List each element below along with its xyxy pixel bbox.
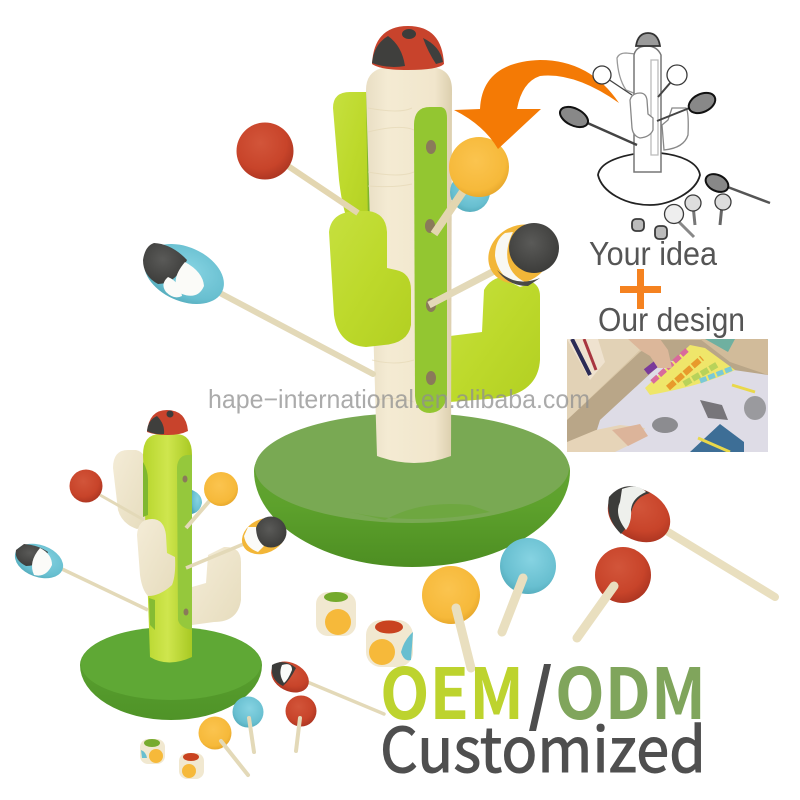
colour fan xyxy=(645,345,735,395)
front arm xyxy=(329,211,411,347)
ODM: ODM xyxy=(555,639,706,740)
large yellow peg xyxy=(422,566,480,668)
title: OEM/ODM xyxy=(380,639,706,740)
OEM: OEM xyxy=(380,639,524,740)
small red peg xyxy=(286,696,316,751)
watermark: hape−international.en.alibaba.com xyxy=(208,384,590,414)
red ball with stick xyxy=(236,122,358,213)
subtitle: Customized: Customized xyxy=(380,700,706,790)
green strip on trunk xyxy=(414,107,447,413)
orange curved arrow xyxy=(454,60,619,149)
small yellow peg xyxy=(198,716,248,775)
sketch: pegs xyxy=(574,117,637,145)
wooden trunk xyxy=(366,67,452,463)
small bee ball xyxy=(186,511,292,568)
sketch: right arm xyxy=(662,108,688,150)
small strip xyxy=(177,455,192,630)
small blue ball xyxy=(192,490,202,514)
your idea line sketch xyxy=(557,33,770,239)
large red-bee peg xyxy=(598,477,775,597)
ladybug xyxy=(372,26,444,70)
bee ball with stick xyxy=(429,213,563,305)
small red die xyxy=(179,753,204,779)
small red ball xyxy=(70,470,144,520)
small arm back xyxy=(113,450,148,529)
loose pieces small set xyxy=(140,655,384,779)
small yellow ball xyxy=(186,472,238,528)
photo: designers with colour swatches xyxy=(567,339,768,452)
large green die xyxy=(316,592,356,636)
small arm right xyxy=(192,547,241,625)
sketch: front arm xyxy=(630,93,653,138)
small cactus toy xyxy=(10,410,292,720)
small trunk xyxy=(143,434,192,662)
wood grain xyxy=(368,108,414,402)
small blue peg xyxy=(232,696,264,752)
large red die xyxy=(366,620,413,667)
sketch: loose parts xyxy=(725,186,770,203)
sketch: back arm xyxy=(617,53,636,94)
small front arm xyxy=(137,519,175,596)
back left arm xyxy=(333,92,372,232)
loose pieces large set xyxy=(316,477,775,668)
small owl ball xyxy=(10,537,148,610)
heading: Our design: Our design xyxy=(598,301,745,338)
small ladybug xyxy=(147,410,188,435)
sketch: stand xyxy=(598,153,700,205)
small base xyxy=(80,627,262,720)
heading: Your idea: Your idea xyxy=(589,235,718,272)
long stick to owl peg xyxy=(218,292,373,374)
base: large green dome xyxy=(254,413,570,567)
blue ball behind xyxy=(450,172,490,212)
main cactus toy xyxy=(135,26,570,567)
small pegholes xyxy=(182,476,188,616)
small green die xyxy=(140,739,165,764)
hands xyxy=(628,339,672,368)
large blue peg xyxy=(500,538,556,632)
slash xyxy=(529,664,551,731)
peg holes xyxy=(425,140,436,385)
blue swatch sheet xyxy=(690,424,744,452)
owl ball xyxy=(135,232,233,316)
yellow ball with stick xyxy=(434,137,509,234)
right arm xyxy=(450,276,540,402)
sketch: ladybug xyxy=(636,33,660,46)
sketch: trunk xyxy=(634,46,661,172)
icon: orange plus xyxy=(620,269,661,309)
sketch on paper xyxy=(652,417,678,433)
small red-bee peg xyxy=(266,655,384,714)
large red peg xyxy=(577,547,651,638)
